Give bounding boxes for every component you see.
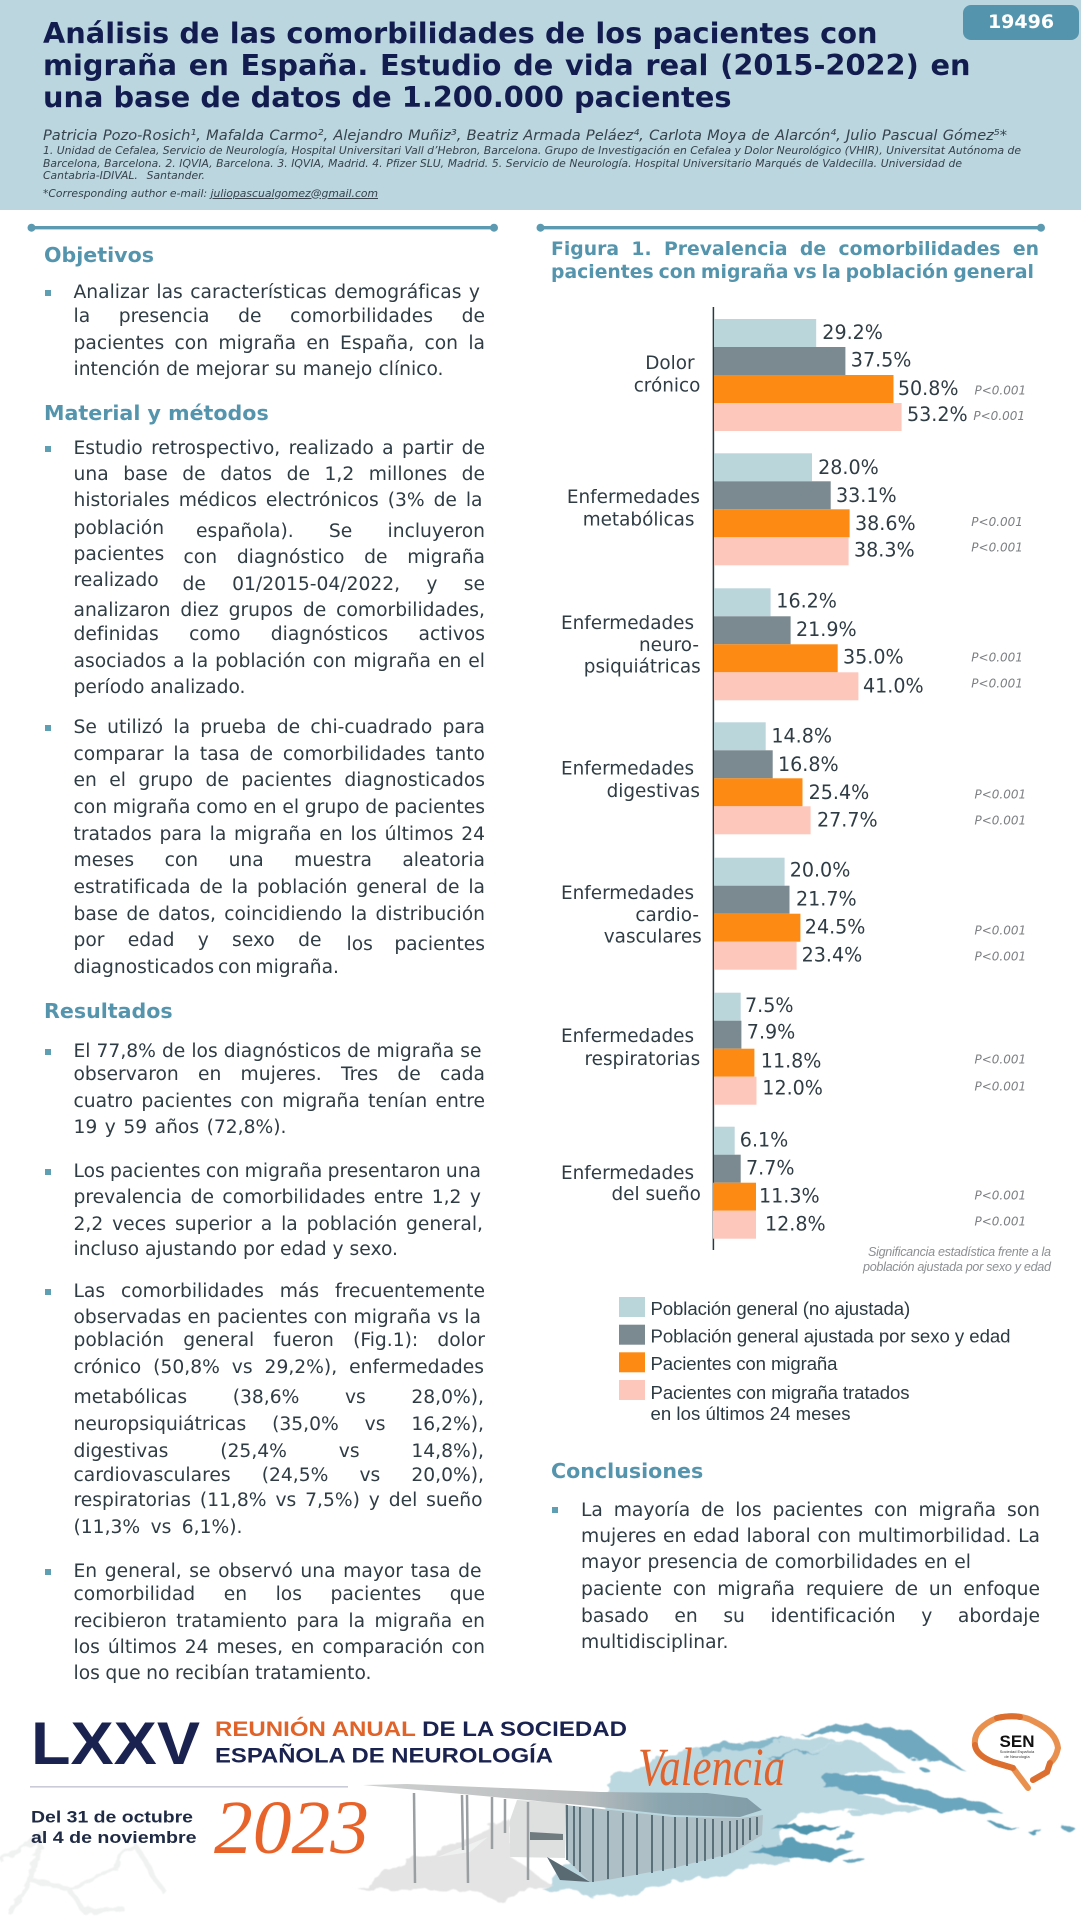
group: dolor crónico: Dolor [645,353,695,374]
heading: Objetivos: Objetivos [44,243,154,267]
group: enfermedades cardiovasculares: P<0.001 [974,924,1026,938]
text: estudio retrospectivo [74,438,485,698]
text: objetivos [74,282,485,380]
text: objetivos: Analizar las características demográficas y [74,282,480,303]
group: enfermedades metabólicas [567,453,1023,565]
text: resultado 1: cuatro pacientes con migraña tenían entre [74,1091,485,1112]
footnote: significancia estadística: Significancia estadística frente a la [868,1245,1051,1259]
text: estudio retrospectivo: historiales médicos electrónicos (3% de la [74,490,482,511]
text: estudio retrospectivo: Estudio retrospectivo, realizado a partir de [74,438,485,458]
heading: Conclusiones: Conclusiones [551,1459,703,1483]
text: estudio retrospectivo: población [74,518,164,538]
title: Análisis de las comorbilidades de los pacientes con [43,16,878,50]
text: resultado 4: los últimos 24 meses, en comparación con [74,1637,485,1658]
text: resultado 1: 19 y 59 años (72,8%). [74,1117,286,1138]
group: enfermedades neuropsiquiátricas: neuro- [639,635,699,656]
group: enfermedades neuropsiquiátricas: P<0.001 [971,677,1023,691]
text: resultado 3: (11,3% vs 6,1%). [74,1517,242,1538]
bullet [45,725,51,731]
group: enfermedades del sueño: 6.1% [740,1129,788,1152]
group: enfermedades del sueño: 11.3% [759,1185,820,1208]
title [43,16,970,114]
right column rule [536,224,1045,232]
figure heading: pacientes con migraña vs la población general [551,262,1034,283]
group: enfermedades del sueño [561,1127,1026,1239]
logo: SEN [975,1716,1058,1788]
group: dolor crónico: P<0.001 [973,409,1025,423]
city: Valencia [638,1737,785,1797]
legend: pacientes tratados: en los últimos 24 meses [650,1403,850,1424]
axis [712,307,714,1250]
affiliations: Cantabria-IDIVAL. Santander. [43,169,205,182]
year: 2023 [214,1786,369,1870]
group: enfermedades metabólicas: 33.1% [836,484,897,507]
group: enfermedades neuropsiquiátricas [561,588,1023,700]
group: enfermedades metabólicas: P<0.001 [971,541,1023,555]
text: conclusiones [581,1500,1040,1653]
text: estudio retrospectivo: de 01/2015-04/2022, y se [182,574,485,595]
dates: al 4 de noviembre [31,1829,196,1847]
text: resultado 2: Los pacientes con migraña presentaron una [74,1161,481,1182]
group: enfermedades cardiovasculares: cardio- [635,905,699,926]
group: dolor crónico: 50.8% [898,377,959,400]
text: chi-cuadrado: diagnosticados con migraña. [74,957,339,978]
congress number: LXXV [31,1710,200,1777]
group: enfermedades cardiovasculares [561,858,1026,970]
group: enfermedades metabólicas: metabólicas [583,510,695,531]
bullet [45,1049,51,1055]
affiliations: Barcelona, Barcelona. 2. IQVIA, Barcelona. 3. IQVIA, Madrid. 4. Pfizer SLU, Madrid. 5. Servicio de Neurología. Hospital Universitario Marqués de Valdecilla. Universidad de [43,157,962,170]
text: estudio retrospectivo: con diagnóstico de migraña [184,547,485,568]
text: chi-cuadrado: con migraña como en el grupo de pacientes [74,797,485,818]
text: resultado 2: prevalencia de comorbilidades entre 1,2 y [74,1187,481,1208]
group: enfermedades neuropsiquiátricas: 41.0% [863,674,924,697]
bullet [45,290,51,296]
text: chi-cuadrado: los pacientes [346,934,485,955]
text: estudio retrospectivo: española). Se incluyeron [196,521,485,542]
legend [619,1297,1010,1424]
bullet [45,1169,51,1175]
text: objetivos: pacientes con migraña en España, con la [74,332,485,354]
text: resultado 2: 2,2 veces superior a la población general, [74,1214,483,1235]
footnote: significancia estadística [862,1245,1052,1274]
heading: Resultados: Resultados [44,999,173,1023]
legend: pacientes tratados [619,1380,910,1424]
congress name: REUNIÓN ANUAL DE LA SOCIEDAD [215,1717,627,1741]
group: dolor crónico: 37.5% [851,349,911,372]
group: enfermedades digestivas: P<0.001 [974,814,1026,828]
text: resultado 1: El 77,8% de los diagnósticos de migraña se [74,1041,482,1062]
text: estudio retrospectivo: asociados a la población con migraña en el [74,651,485,672]
group: enfermedades del sueño: 7.7% [746,1157,795,1180]
bullet [552,1507,558,1513]
group: enfermedades respiratorias: respiratorias [584,1049,700,1070]
title: migraña en España. Estudio de vida real (2015-2022) en [43,48,970,82]
decorative map wash [0,1832,162,1915]
text: estudio retrospectivo: definidas como diagnósticos activos [74,624,485,645]
bullet [45,1569,51,1575]
group: enfermedades neuropsiquiátricas: Enfermedades [561,613,694,634]
heading: Material y métodos: Material y métodos [44,401,269,425]
group: enfermedades neuropsiquiátricas: 35.0% [843,646,904,669]
title: una base de datos de 1.200.000 pacientes [43,80,732,114]
text: resultado 1 [74,1041,485,1138]
congress name [215,1717,627,1768]
group: dolor crónico: 29.2% [822,321,883,344]
text: conclusiones: La mayoría de los pacientes con migraña son [581,1500,1040,1521]
group: dolor crónico: P<0.001 [974,384,1026,398]
group: enfermedades respiratorias: 7.9% [747,1020,795,1043]
text: chi-cuadrado: base de datos, coincidiendo la distribución [74,904,485,925]
group: enfermedades neuropsiquiátricas: psiquiátricas [584,657,701,678]
abstract number badge [963,5,1079,40]
text: resultado 4 [74,1561,485,1684]
affiliations: 1. Unidad de Cefalea, Servicio de Neurología, Hospital Universitari Vall d’Hebron, Barcelona. Grupo de Investigación en Cefalea y Dolor Neurológico (VHIR), Universitat Autónoma de [43,144,1021,157]
left column rule [28,224,498,232]
group: enfermedades digestivas: 27.7% [817,809,878,832]
text: resultado 4: En general, se observó una mayor tasa de [74,1561,482,1582]
group: enfermedades neuropsiquiátricas: 16.2% [776,590,837,613]
group: enfermedades cardiovasculares: 24.5% [805,916,865,939]
abstract number badge: 19496 [988,11,1054,33]
dates [31,1809,196,1847]
text: estudio retrospectivo: pacientes [74,544,164,565]
text: chi-cuadrado: tratados para la migraña en los últimos 24 [74,824,485,845]
text: chi-cuadrado [74,717,485,978]
legend: población ajustada: Población general ajustada por sexo y edad [650,1326,1010,1347]
footnote: significancia estadística: población ajustada por sexo y edad [862,1260,1052,1274]
text: resultado 4: los que no recibían tratamiento. [74,1663,372,1684]
text: resultado 2 [74,1161,483,1260]
group: enfermedades digestivas: P<0.001 [974,788,1026,802]
figure heading [551,239,1039,283]
group: dolor crónico: crónico [634,376,700,397]
group: enfermedades metabólicas: Enfermedades [567,487,700,508]
text: conclusiones: mujeres en edad laboral con multimorbilidad. La [581,1526,1040,1547]
text: conclusiones: basado en su identificación y abordaje [581,1606,1040,1627]
text: resultado 3 [74,1281,485,1538]
congress banner [0,1710,1076,1915]
bar chart: prevalencia de comorbilidades [561,307,1052,1274]
text: objetivos: la presencia de comorbilidades de [74,306,485,327]
group: enfermedades metabólicas: P<0.001 [971,515,1023,529]
text: resultado 3: población general fueron (Fig.1): dolor [74,1330,485,1351]
bullet [45,1289,51,1295]
text: resultado 3: neuropsiquiátricas (35,0% vs 16,2%), [74,1414,484,1435]
legend: población general: Población general (no ajustada) [650,1298,910,1319]
group: enfermedades respiratorias: 7.5% [745,994,794,1017]
group: enfermedades respiratorias: 11.8% [761,1050,821,1073]
text: estudio retrospectivo: analizaron diez grupos de comorbilidades, [74,600,485,621]
header band [0,0,1081,210]
text: resultado 3: cardiovasculares (24,5% vs 20,0%), [74,1465,484,1486]
text: conclusiones: paciente con migraña requiere de un enfoque [581,1579,1040,1600]
logo: SEN: Sociedad Española [1000,1749,1035,1754]
text: chi-cuadrado: en el grupo de pacientes diagnosticados [74,770,485,791]
text: estudio retrospectivo: realizado [74,570,159,591]
group: enfermedades respiratorias: P<0.001 [974,1080,1026,1094]
text: estudio retrospectivo: período analizado. [74,677,246,698]
text: resultado 3: observadas en pacientes con migraña vs la [74,1307,481,1328]
group: enfermedades respiratorias: P<0.001 [974,1053,1026,1067]
text: resultado 4: comorbilidad en los pacientes que [74,1584,485,1605]
bullet [45,446,51,452]
group: enfermedades respiratorias: 12.0% [762,1077,823,1100]
group: enfermedades neuropsiquiátricas: 21.9% [796,618,857,641]
group: enfermedades respiratorias [561,993,1026,1105]
group: enfermedades digestivas: digestivas [607,781,700,802]
text: resultado 4: recibieron tratamiento para la migraña en [74,1611,485,1632]
group: enfermedades digestivas: Enfermedades [561,759,694,780]
group: enfermedades digestivas: 25.4% [809,781,869,804]
group: enfermedades neuropsiquiátricas: P<0.001 [971,651,1023,665]
group: enfermedades cardiovasculares: 21.7% [796,888,857,911]
text: resultado 3: crónico (50,8% vs 29,2%), enfermedades [74,1357,484,1378]
authors: Patricia Pozo-Rosich¹, Mafalda Carmo², Alejandro Muñiz³, Beatriz Armada Peláez⁴, Carlota Moya de Alarcón⁴, Julio Pascual Gómez⁵* [43,127,1007,144]
text: resultado 3: metabólicas (38,6% vs 28,0%), [74,1387,484,1408]
group: enfermedades del sueño: Enfermedades [561,1163,694,1184]
group: dolor crónico: 53.2% [907,403,968,426]
figure heading: Figura 1. Prevalencia de comorbilidades en [551,239,1039,260]
text: chi-cuadrado: por edad y sexo de [74,930,322,951]
dates: Del 31 de octubre [31,1809,193,1827]
text: chi-cuadrado: estratificada de la población general de la [74,877,485,898]
group: enfermedades digestivas [561,722,1026,834]
group: enfermedades del sueño: del sueño [612,1184,701,1205]
text: resultado 2: incluso ajustando por edad y sexo. [74,1239,398,1260]
text: chi-cuadrado: Se utilizó la prueba de chi-cuadrado para [74,717,485,738]
group: enfermedades cardiovasculares: Enfermedades [561,883,694,904]
group: enfermedades del sueño: P<0.001 [974,1215,1026,1229]
watercolour wash [543,1723,1078,1898]
logo: SEN: de Neurología [1004,1754,1030,1759]
group: enfermedades del sueño: P<0.001 [974,1189,1026,1203]
group: enfermedades respiratorias: Enfermedades [561,1026,694,1047]
group: enfermedades metabólicas: 28.0% [818,456,879,479]
text: resultado 1: observaron en mujeres. Tres de cada [74,1064,485,1085]
text: resultado 3: digestivas (25,4% vs 14,8%), [74,1441,484,1462]
text: chi-cuadrado: comparar la tasa de comorbilidades tanto [74,744,485,765]
group: enfermedades digestivas: 14.8% [771,725,832,748]
corresponding author: *Corresponding author e-mail: juliopascualgomez@gmail.com [43,186,378,200]
group: enfermedades metabólicas: 38.3% [854,539,915,562]
text: objetivos: intención de mejorar su manejo clínico. [74,358,444,380]
text: estudio retrospectivo: una base de datos de 1,2 millones de [74,464,485,485]
group: dolor crónico [634,319,1026,431]
group: enfermedades cardiovasculares: P<0.001 [974,950,1026,964]
affiliations [43,144,1021,182]
text: chi-cuadrado: meses con una muestra aleatoria [74,850,485,871]
text: conclusiones: multidisciplinar. [581,1632,728,1653]
group: enfermedades cardiovasculares: vasculares [604,927,702,948]
congress name: ESPAÑOLA DE NEUROLOGÍA [215,1745,553,1768]
legend: pacientes con migraña: Pacientes con migraña [650,1353,838,1374]
logo: SEN: SEN [1000,1732,1034,1751]
group: enfermedades del sueño: 12.8% [765,1212,826,1235]
text: resultado 3: Las comorbilidades más frecuentemente [74,1281,485,1302]
text: conclusiones: mayor presencia de comorbilidades en el [581,1552,971,1573]
illustration: building [357,1784,763,1900]
legend: pacientes tratados: Pacientes con migraña tratados [650,1382,910,1403]
group: enfermedades cardiovasculares: 23.4% [802,944,862,967]
text: resultado 3: respiratorias (11,8% vs 7,5%) y del sueño [74,1490,482,1511]
group: enfermedades metabólicas: 38.6% [855,512,916,535]
group: enfermedades cardiovasculares: 20.0% [790,859,850,882]
group: enfermedades digestivas: 16.8% [778,753,839,776]
